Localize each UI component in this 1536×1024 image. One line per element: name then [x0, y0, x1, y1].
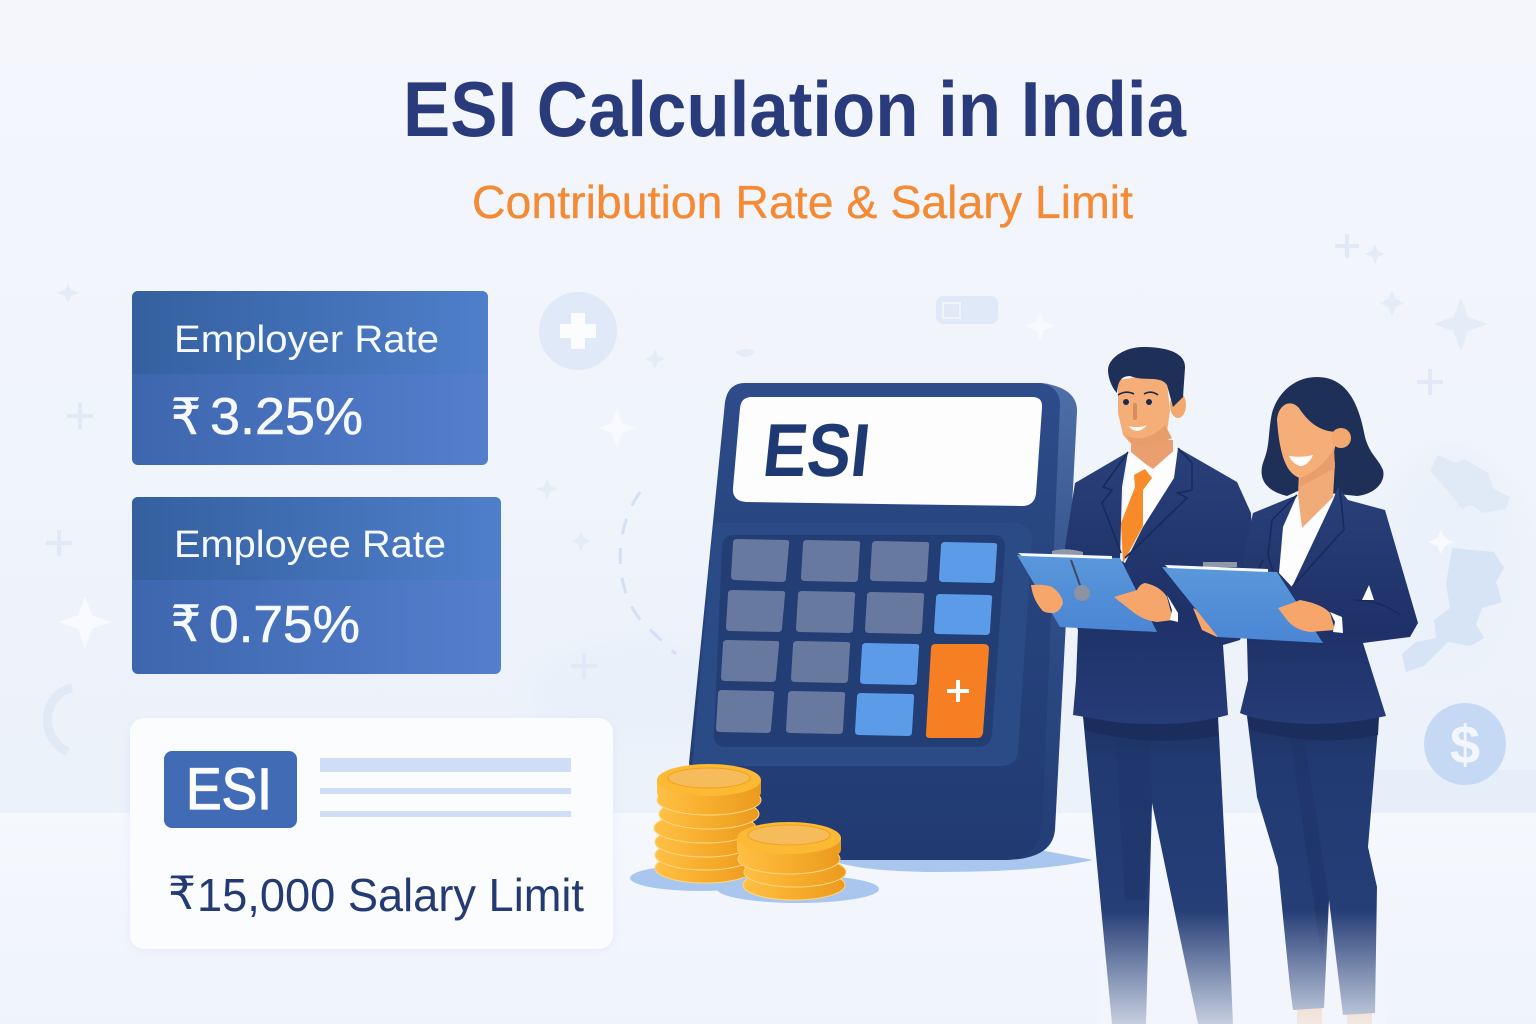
panel: employer rate — [132, 291, 488, 465]
man ear — [1170, 392, 1186, 418]
man jacket — [1065, 448, 1255, 724]
woman neck — [1298, 462, 1335, 528]
calculator — [689, 383, 1093, 872]
calculator side edge — [1000, 383, 1077, 860]
man clipboard — [1017, 549, 1157, 632]
orange plus key — [926, 644, 989, 738]
panel: salary limit card — [130, 718, 613, 949]
employee rate value: ₹ — [171, 595, 201, 653]
calculator keypad well — [692, 523, 1032, 766]
woman feet — [1297, 1008, 1372, 1024]
ESI badge: ESI — [186, 757, 272, 822]
man tie — [1121, 469, 1152, 563]
employer rate label: Employer Rate — [174, 319, 439, 361]
ESI badge — [164, 751, 297, 828]
woman face — [1277, 403, 1338, 478]
woman hair — [1262, 377, 1383, 496]
woman jacket — [1240, 487, 1418, 724]
woman lapel lines — [1248, 490, 1400, 615]
man eyes — [1118, 392, 1158, 405]
employee rate label: Employee Rate — [174, 524, 446, 566]
decorative background icons — [46, 234, 1510, 785]
salary limit text: ₹ — [168, 866, 196, 920]
woman left hand — [1193, 608, 1227, 637]
coin stack: right — [737, 822, 846, 900]
man right hand — [1114, 583, 1173, 622]
person: woman — [1162, 377, 1418, 1024]
man nose — [1133, 403, 1137, 420]
man smile — [1129, 425, 1147, 431]
subtitle: Contribution Rate & Salary Limit — [472, 176, 1133, 228]
man hair — [1108, 347, 1185, 407]
woman clipboard — [1162, 562, 1323, 643]
woman right hand — [1278, 600, 1335, 632]
calculator body — [689, 383, 1060, 860]
employer rate value: 3.25% — [210, 388, 363, 446]
woman smile — [1289, 455, 1313, 466]
employer rate value: ₹ — [171, 388, 201, 446]
bottom fade over figures — [1100, 910, 1385, 1024]
panel: employee rate — [132, 497, 501, 674]
calculator screen — [733, 397, 1042, 506]
woman blouse — [1279, 495, 1333, 587]
person: man — [1017, 347, 1255, 1024]
woman ear — [1331, 428, 1351, 448]
man left hand — [1031, 585, 1063, 613]
coin shadows — [630, 865, 879, 903]
woman trousers — [1247, 716, 1379, 1015]
document lines — [320, 758, 571, 817]
title: ESI Calculation in India — [403, 65, 1187, 153]
salary limit text: 15,000 Salary Limit — [197, 869, 584, 921]
man neck — [1131, 440, 1173, 470]
man lapels — [1102, 448, 1192, 558]
man face — [1118, 375, 1170, 446]
man shirt — [1121, 447, 1178, 530]
calculator screen: ESI — [759, 408, 874, 492]
woman cuff — [1330, 612, 1343, 633]
woman arm gap — [1362, 585, 1374, 600]
man trousers — [1083, 716, 1233, 1024]
employee rate value: 0.75% — [209, 596, 360, 654]
decorative background icons: $ — [1450, 715, 1480, 775]
coin stack: left — [654, 764, 761, 883]
calculator keys — [716, 539, 929, 734]
man cuff — [1167, 595, 1178, 622]
